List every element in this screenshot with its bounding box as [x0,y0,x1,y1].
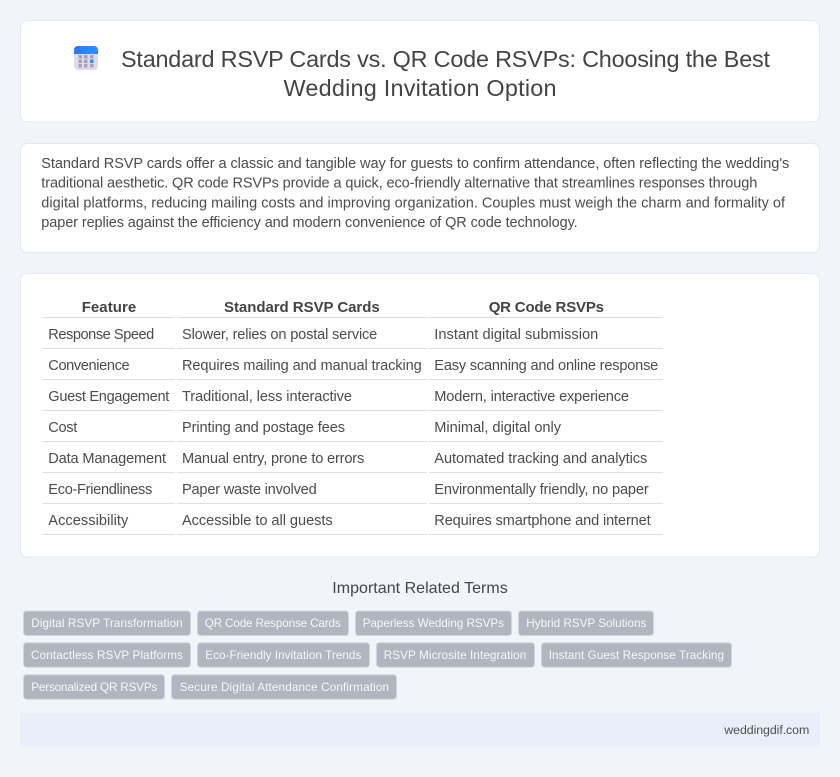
row: response speed: Instant digital submission [434,327,598,343]
tag: hybrid rsvp solutions: Hybrid RSVP Solutions [526,617,646,630]
row: guest engagement [43,389,663,411]
tag: secure digital attendance confirmation [172,675,396,699]
tag: instant guest response tracking [542,643,732,667]
tag: digital rsvp transformation: Digital RSVP Transformation [31,617,183,630]
panel: header [20,20,820,122]
table header row: QR Code RSVPs [489,299,604,316]
text block: description: Standard RSVP cards offer a classic and tangible way for guests to confirm attendance, often reflecting the wedding's [41,156,789,172]
tag: eco-friendly invitation trends: Eco-Friendly Invitation Trends [205,649,361,662]
row: cost: Cost [48,420,77,436]
title [121,46,770,101]
row: eco-friendliness [43,482,663,504]
row: data management: Manual entry, prone to errors [182,451,364,467]
text block: description [41,156,789,231]
row: convenience [43,358,663,380]
panel: comparison table [20,274,820,557]
row: accessibility: Requires smartphone and internet [434,513,651,529]
tag: personalized qr rsvps: Personalized QR RSVPs [31,681,157,694]
tag: paperless wedding rsvps: Paperless Wedding RSVPs [363,617,504,630]
title: Wedding Invitation Option [284,75,556,101]
row: data management: Automated tracking and analytics [434,451,647,467]
tag: contactless rsvp platforms: Contactless RSVP Platforms [31,649,183,662]
row: accessibility: Accessible to all guests [182,513,333,529]
row: eco-friendliness: Eco-Friendliness [48,482,152,498]
tag: contactless rsvp platforms [24,643,190,667]
tag: hybrid rsvp solutions [518,611,654,636]
row: convenience: Requires mailing and manual tracking [182,358,422,374]
tag: instant guest response tracking: Instant Guest Response Tracking [549,649,724,662]
tag: qr code response cards [198,611,348,636]
row: response speed: Response Speed [48,327,154,343]
row: guest engagement: Guest Engagement [48,389,169,405]
heading: related terms: Important Related Terms [332,580,508,597]
table header row [43,299,663,318]
row: response speed: Slower, relies on postal service [182,327,377,343]
row: accessibility: Accessibility [48,513,129,529]
tag: secure digital attendance confirmation: Secure Digital Attendance Confirmation [180,681,389,694]
panel: intro text [20,144,820,252]
title: Standard RSVP Cards vs. QR Code RSVPs: Choosing the Best [121,46,770,72]
row: eco-friendliness: Environmentally friendly, no paper [434,482,649,498]
tag: eco-friendly invitation trends [198,643,370,667]
row: cost [43,420,663,442]
row: data management: Data Management [48,451,166,467]
row: data management [43,451,663,473]
row: cost: Printing and postage fees [182,420,345,436]
text block: description: digital platforms, reducing mailing costs and improving organization. Couples must weigh the charm and formality of [41,196,786,212]
row: cost: Minimal, digital only [434,420,562,436]
footer [20,713,820,747]
row: eco-friendliness: Paper waste involved [182,482,317,498]
row: response speed [43,327,663,349]
row: guest engagement: Traditional, less interactive [182,389,352,405]
table header row: Standard RSVP Cards [224,299,380,316]
tag: rsvp microsite integration [376,643,534,667]
row: guest engagement: Modern, interactive experience [434,389,629,405]
footer: weddingdif.com [723,723,809,737]
text block: description: paper replies against the efficiency and modern convenience of QR code technology. [41,215,578,231]
icon: calendar [74,46,98,70]
text block: description: traditional aesthetic. QR code RSVPs provide a quick, eco-friendly alternative that streamlines responses through [41,176,757,192]
tag: paperless wedding rsvps [356,611,512,636]
row: accessibility [43,513,663,535]
table header row: Feature [82,299,136,316]
tag: digital rsvp transformation [24,611,190,636]
row: convenience: Easy scanning and online response [434,358,658,374]
tag: personalized qr rsvps [24,675,164,699]
tag: rsvp microsite integration: RSVP Microsite Integration [384,649,526,662]
tag: qr code response cards: QR Code Response Cards [205,617,341,630]
row: convenience: Convenience [48,358,130,374]
panel: related term tags [24,611,732,699]
